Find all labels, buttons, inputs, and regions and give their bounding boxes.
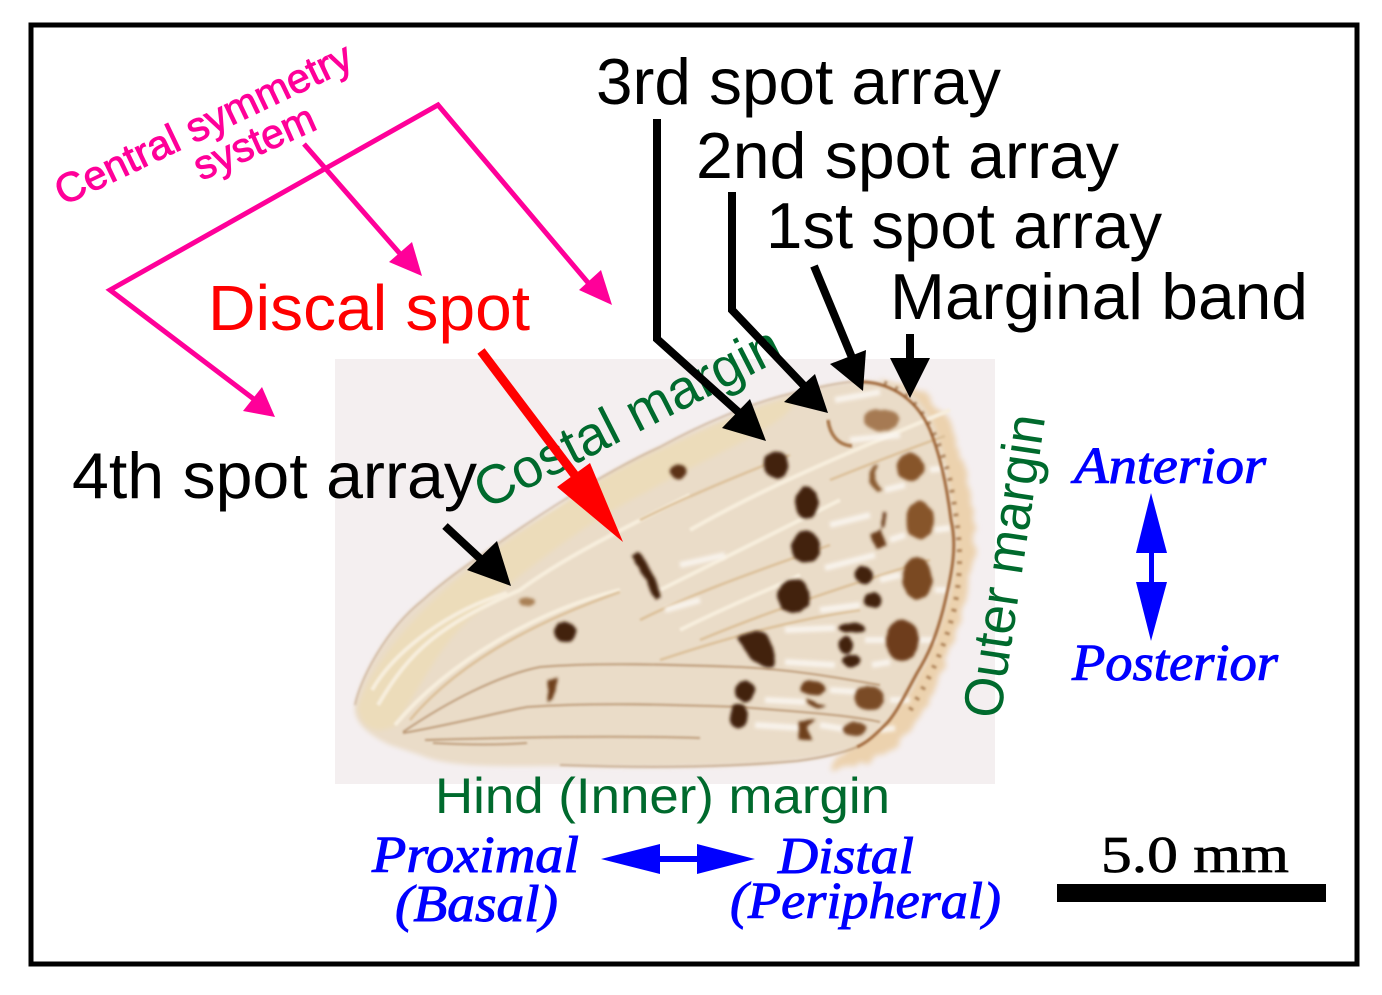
label: basal: (Basal) (395, 876, 558, 933)
label: 3rd spot array: 3rd spot array (596, 45, 1002, 118)
label: costal margin: Costal margin (463, 313, 791, 521)
label: 1st spot array: 1st spot array (766, 189, 1162, 262)
label: 4th spot array: 4th spot array (72, 439, 477, 512)
arrow: 1st spot array (814, 266, 866, 391)
label: proximal: Proximal (371, 827, 579, 884)
arrow: 2nd spot array (732, 192, 828, 413)
wing veins (372, 410, 950, 725)
scale bar (1057, 884, 1326, 902)
wing spots (519, 409, 934, 740)
white streaks (665, 392, 950, 730)
tan fold lines (410, 436, 945, 720)
arrow: proximal-distal (601, 844, 755, 874)
label: central symmetry system: system (186, 95, 323, 189)
label: distal: Distal (777, 828, 914, 885)
arrow: 4th spot array (445, 526, 511, 586)
wing fringe (830, 382, 975, 768)
label: hind margin: Hind (Inner) margin (435, 768, 890, 824)
arrow: anterior-posterior (1136, 493, 1167, 641)
wing photograph (335, 359, 995, 784)
costal cream band (358, 396, 795, 730)
submarginal ring (828, 420, 852, 446)
label: peripheral: (Peripheral) (730, 873, 1001, 930)
marginal line (857, 382, 960, 747)
label: central symmetry system: Central symmetry (47, 33, 360, 214)
label: marginal band: Marginal band (890, 260, 1308, 333)
label: scale value: 5.0 mm (1101, 827, 1289, 884)
label: outer margin: Outer margin (951, 410, 1057, 722)
wing body (355, 381, 957, 767)
pink bracket arrows (110, 105, 612, 417)
arrow: discal spot (481, 351, 623, 542)
label: posterior: Posterior (1071, 635, 1279, 692)
arrow: marginal band (890, 334, 930, 398)
arrow: 3rd spot array (657, 119, 766, 441)
label: discal spot: Discal spot (208, 272, 530, 344)
label: 2nd spot array: 2nd spot array (696, 119, 1119, 192)
label: anterior: Anterior (1071, 438, 1267, 495)
